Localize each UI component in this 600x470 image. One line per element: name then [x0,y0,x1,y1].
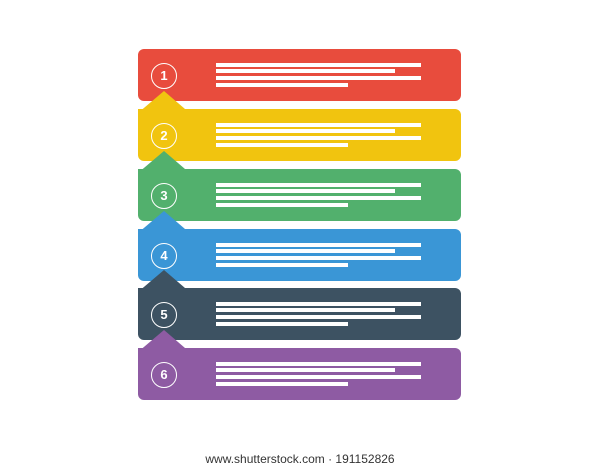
footer: www.shutterstock.com · 191152826 [205,452,395,466]
bar 6 [138,348,461,400]
number 1: 1 [160,68,168,83]
arrow tab 3 [138,151,185,174]
number 4: 4 [160,248,168,263]
bar 2 [138,109,461,161]
text lines 5 [216,302,421,326]
text lines 1 [216,63,421,87]
arrow tab 5 [138,270,185,294]
number 6 [151,362,177,388]
arrow tab 2 [138,91,185,114]
text lines 2 [216,123,421,147]
text lines 4 [216,243,421,267]
number 3 [151,183,177,209]
number 3: 3 [160,188,168,203]
arrow tab 6 [138,330,185,354]
number 4 [151,243,177,269]
number 2 [151,123,177,149]
bar 4 [138,229,461,281]
number 5: 5 [160,307,168,322]
arrow tab 4 [138,211,185,234]
bar 1 [138,49,461,101]
number 5 [151,302,177,328]
number 2: 2 [160,128,168,143]
number 6: 6 [160,367,168,382]
bar 3 [138,169,461,221]
text lines 3 [216,183,421,207]
text lines 6 [216,362,421,386]
number 1 [151,63,177,89]
bar 5 [138,288,461,340]
